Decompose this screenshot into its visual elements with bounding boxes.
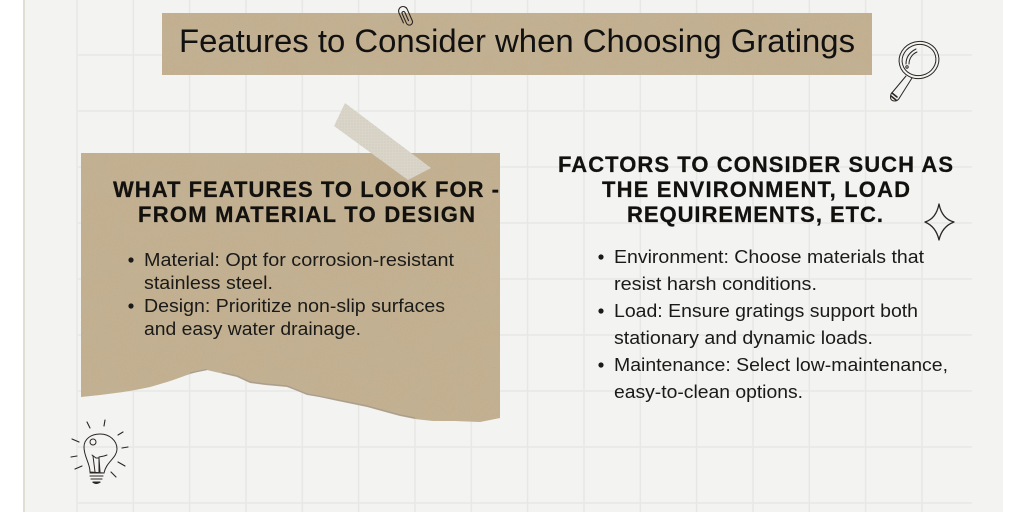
icon: magnifying glass: [890, 37, 943, 101]
torn kraft paper: [81, 153, 500, 422]
bullet list: resist harsh conditions.: [614, 273, 817, 294]
washi tape: [334, 103, 431, 180]
panel heading: REQUIREMENTS, ETC.: [627, 202, 883, 227]
icon: paperclip: [397, 5, 414, 27]
icon: four-point star: [925, 204, 954, 240]
torn edge shadow: [190, 370, 415, 418]
bullet list: [128, 249, 454, 339]
bullet list: stationary and dynamic loads.: [614, 327, 873, 348]
bullet list: and easy water drainage.: [144, 318, 361, 339]
panel heading: WHAT FEATURES TO LOOK FOR -: [113, 177, 499, 202]
panel heading: FROM MATERIAL TO DESIGN: [138, 202, 475, 227]
bullet list: Material: Opt for corrosion-resistant: [144, 249, 454, 270]
title: Features to Consider when Choosing Gratings: [179, 23, 855, 59]
bullet list: Load: Ensure gratings support both: [614, 300, 918, 321]
bullet list: Maintenance: Select low-maintenance,: [614, 354, 948, 375]
bullet list: [598, 246, 948, 402]
bullet list: easy-to-clean options.: [614, 381, 803, 402]
bullet list: Environment: Choose materials that: [614, 246, 924, 267]
panel: what features to look for: [81, 153, 500, 422]
panel heading: [113, 177, 499, 227]
panel: factors to consider: [558, 152, 953, 402]
panel heading: [558, 152, 953, 227]
icon: light bulb: [71, 420, 128, 484]
panel heading: FACTORS TO CONSIDER SUCH AS: [558, 152, 953, 177]
bullet list: stainless steel.: [144, 272, 273, 293]
panel heading: THE ENVIRONMENT, LOAD: [602, 177, 910, 202]
bullet list: Design: Prioritize non-slip surfaces: [144, 295, 445, 316]
title banner: [162, 13, 872, 75]
